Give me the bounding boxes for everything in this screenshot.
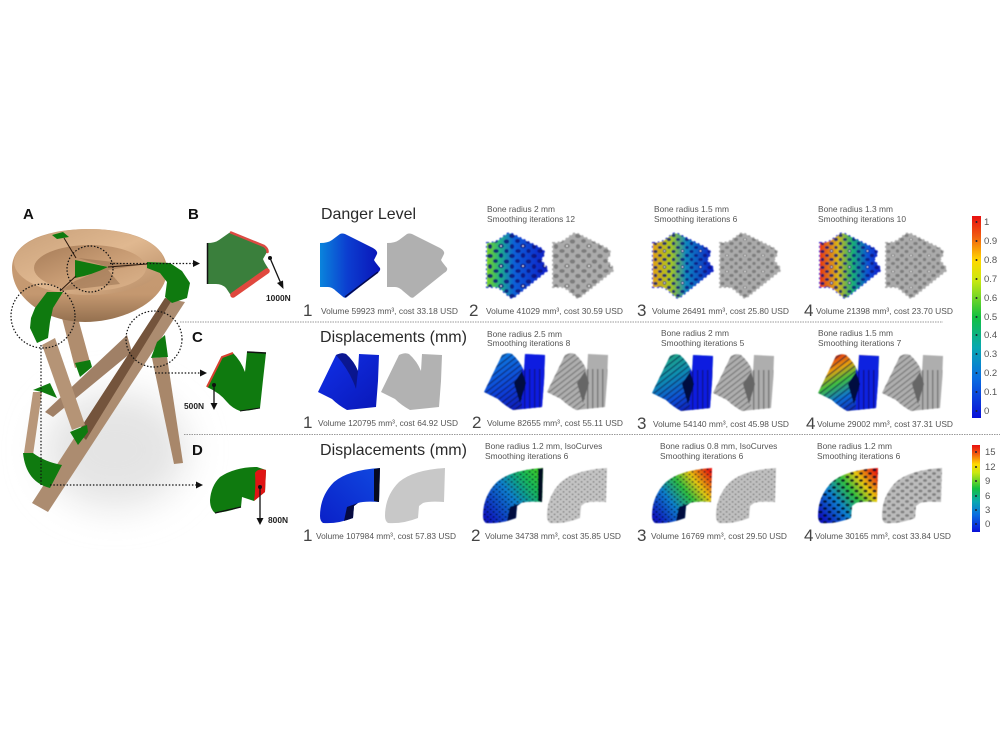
variant 3 header: Bone radius 1.5 mm	[654, 204, 729, 214]
variant 2 header	[487, 204, 575, 224]
colour scale: displacement: 0	[985, 519, 990, 530]
seat connector lines	[60, 238, 147, 291]
variant 3 number: 3	[637, 301, 646, 320]
variant 4 header: Bone radius 1.2 mm	[817, 441, 892, 451]
load label: 500N	[184, 401, 204, 411]
variant 1 grey	[387, 234, 447, 298]
panel letter A: A	[23, 206, 34, 223]
variant 3 grey lattice	[716, 468, 776, 524]
variant 1 caption: Volume 59923 mm³, cost 33.18 USD	[321, 306, 458, 316]
variant 3 lattice	[652, 468, 712, 524]
colour scale: danger level	[972, 216, 997, 418]
variant 3 header: Bone radius 2 mm	[661, 328, 729, 338]
colour scale: danger level: 0.5	[984, 312, 997, 323]
stool seat	[12, 229, 167, 322]
variant 2 header: Bone radius 2 mm	[487, 204, 555, 214]
variant 2 header: Smoothing iterations 6	[485, 451, 569, 461]
variant 2 number: 2	[472, 413, 481, 432]
load label: 1000N	[266, 293, 291, 303]
part D with load	[210, 467, 288, 525]
colour scale: displacement: 3	[985, 505, 990, 516]
variant 4 caption: Volume 29002 mm³, cost 37.31 USD	[817, 419, 953, 429]
variant 1 number: 1	[303, 413, 312, 432]
variant 4 header: Bone radius 1.3 mm	[818, 204, 893, 214]
variant 3 header: Smoothing iterations 6	[654, 214, 738, 224]
variant 3 header: Smoothing iterations 5	[661, 338, 745, 348]
variant 4 number: 4	[806, 414, 815, 433]
variant 4 grey lattice	[882, 354, 944, 412]
variant 4 grey lattice	[886, 233, 948, 299]
variant 4 lattice	[820, 233, 882, 299]
variant 3 header	[654, 204, 738, 224]
variant 2 lattice	[487, 233, 549, 299]
colour scale: displacement: 6	[985, 491, 990, 502]
colour scale: danger level: 0.1	[984, 387, 997, 398]
variant 4 header	[818, 328, 902, 348]
variant 4 caption: Volume 21398 mm³, cost 23.70 USD	[816, 306, 953, 316]
variant 3 lattice	[652, 354, 714, 412]
part B with load	[207, 232, 291, 303]
variant 3 number: 3	[637, 526, 646, 545]
variant 1 grey	[381, 353, 442, 410]
heading: Displacements (mm)	[320, 329, 467, 346]
variant 3 number: 3	[637, 414, 646, 433]
variant 2 number: 2	[471, 526, 480, 545]
dotted leader arrows	[41, 260, 207, 488]
variant 1 solid	[318, 353, 379, 410]
panel letter C: C	[192, 329, 203, 346]
variant 4 header: Smoothing iterations 7	[818, 338, 902, 348]
floor shadow	[43, 392, 187, 508]
heading: Displacements (mm)	[320, 442, 467, 459]
variant 2 header: Smoothing iterations 12	[487, 214, 575, 224]
colour scale: danger level: 0.2	[984, 368, 997, 379]
row D: displacements	[303, 441, 951, 545]
panel letter B: B	[188, 206, 199, 223]
variant 2 grey lattice	[547, 353, 609, 411]
stool legs	[24, 298, 185, 512]
variant 2 header: Bone radius 2.5 mm	[487, 329, 562, 339]
colour scale: danger level: 0.9	[984, 236, 997, 247]
variant 4 header: Smoothing iterations 10	[818, 214, 906, 224]
panel letter D: D	[192, 442, 203, 459]
variant 2 lattice	[483, 468, 543, 524]
row B: danger level	[303, 204, 953, 320]
row C: displacements	[303, 328, 953, 433]
colour scale: danger level: 0	[984, 406, 989, 417]
variant 4 lattice	[818, 468, 878, 524]
variant 1 number: 1	[303, 301, 312, 320]
colour scale: danger level: 0.6	[984, 293, 997, 304]
variant 3 grey lattice	[720, 233, 782, 299]
green joints on seat	[30, 232, 190, 343]
variant 4 grey lattice	[882, 468, 942, 524]
variant 3 header	[661, 328, 745, 348]
variant 3 caption: Volume 26491 mm³, cost 25.80 USD	[652, 306, 789, 316]
green joints on legs	[23, 335, 168, 488]
variant 2 caption: Volume 82655 mm³, cost 55.11 USD	[487, 418, 623, 428]
variant 2 lattice	[484, 353, 546, 411]
colour scale: danger level: 0.7	[984, 274, 997, 285]
colour scale: displacement: 15	[985, 447, 996, 458]
variant 3 lattice	[653, 233, 715, 299]
colour scale: danger level: 0.3	[984, 349, 997, 360]
colour scale: danger level: 0.4	[984, 330, 997, 341]
variant 4 number: 4	[804, 526, 813, 545]
variant 4 lattice	[818, 354, 880, 412]
heading: Danger Level	[321, 206, 416, 223]
load label: 800N	[268, 515, 288, 525]
variant 4 caption: Volume 30165 mm³, cost 33.84 USD	[815, 531, 951, 541]
variant 1 number: 1	[303, 526, 312, 545]
variant 2 grey lattice	[547, 468, 607, 524]
variant 2 caption: Volume 34738 mm³, cost 35.85 USD	[485, 531, 621, 541]
colour scale: displacement: 9	[985, 476, 990, 487]
variant 1 solid	[320, 468, 380, 523]
variant 3 header	[660, 441, 777, 461]
variant 3 caption: Volume 54140 mm³, cost 45.98 USD	[653, 419, 789, 429]
variant 4 header: Bone radius 1.5 mm	[818, 328, 893, 338]
variant 4 number: 4	[804, 301, 813, 320]
part C with load	[184, 352, 266, 411]
variant 3 header: Bone radius 0.8 mm, IsoCurves	[660, 441, 777, 451]
dotted circles	[11, 246, 182, 367]
variant 2 header	[485, 441, 602, 461]
variant 2 number: 2	[469, 301, 478, 320]
variant 2 header: Smoothing iterations 8	[487, 338, 571, 348]
variant 2 grey lattice	[553, 233, 615, 299]
colour scale: danger level: 0.8	[984, 255, 997, 266]
row dividers	[180, 321, 943, 323]
variant 1 solid	[320, 234, 380, 298]
variant 4 header	[818, 204, 906, 224]
variant 4 header: Smoothing iterations 6	[817, 451, 901, 461]
panel A: stool	[11, 229, 190, 512]
variant 1 caption: Volume 107984 mm³, cost 57.83 USD	[316, 531, 456, 541]
colour scale: displacement	[972, 445, 996, 532]
variant 2 header: Bone radius 1.2 mm, IsoCurves	[485, 441, 602, 451]
variant 2 header	[487, 329, 571, 348]
variant 4 header	[817, 441, 901, 461]
colour scale: danger level: 1	[984, 217, 989, 228]
variant 1 caption: Volume 120795 mm³, cost 64.92 USD	[318, 418, 458, 428]
variant 2 caption: Volume 41029 mm³, cost 30.59 USD	[486, 306, 623, 316]
variant 3 caption: Volume 16769 mm³, cost 29.50 USD	[651, 531, 787, 541]
variant 3 grey lattice	[713, 354, 775, 412]
variant 3 header: Smoothing iterations 6	[660, 451, 744, 461]
colour scale: displacement: 12	[985, 462, 996, 473]
variant 1 grey	[385, 468, 445, 523]
